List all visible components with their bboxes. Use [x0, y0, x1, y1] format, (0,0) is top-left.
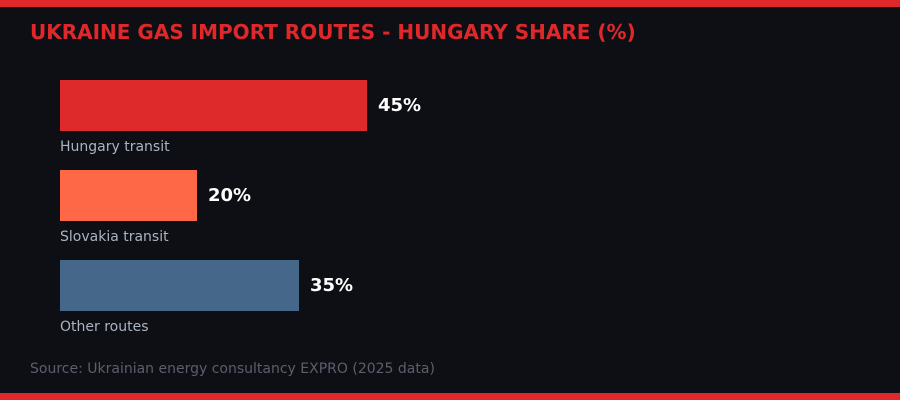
value: 20%: 20%	[208, 185, 251, 206]
title: UKRAINE GAS IMPORT ROUTES - HUNGARY SHARE (%)	[30, 20, 636, 44]
value: 35%: 35%	[310, 275, 353, 296]
label: Slovakia transit: Slovakia transit	[60, 229, 169, 245]
label: Other routes: Other routes	[60, 319, 148, 335]
bar: Other routes	[60, 260, 299, 311]
bar: Hungary transit	[60, 80, 367, 131]
value: 45%: 45%	[378, 95, 421, 116]
source: Source: Ukrainian energy consultancy EXPRO (2025 data)	[30, 361, 435, 377]
label: Hungary transit: Hungary transit	[60, 139, 170, 155]
bar: Slovakia transit	[60, 170, 197, 221]
bar chart	[60, 80, 421, 335]
